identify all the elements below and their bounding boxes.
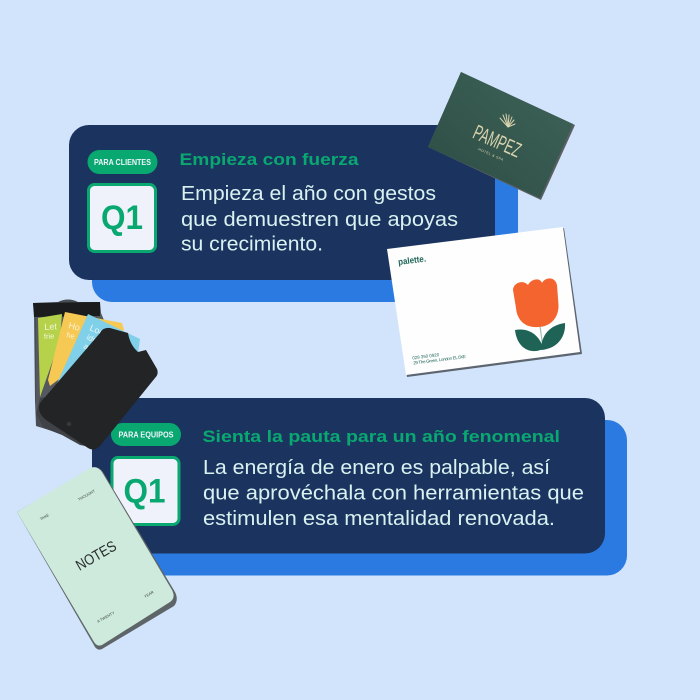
wallet back tray [33, 300, 108, 438]
text block: clientes: su crecimiento. [181, 234, 323, 256]
small labels: YEAR [144, 590, 155, 599]
wordmark: Pampez: PAMPEZ [469, 121, 525, 162]
notebook: notes [17, 467, 177, 650]
heading: empieza con fuerza: Empieza con fuerza [180, 150, 359, 169]
badge: Q1 clientes: Q1 [101, 199, 143, 237]
tag: para clientes [88, 150, 158, 174]
address text: 029 350 0920 [412, 352, 440, 360]
tag: para clientes: PARA CLIENTES [94, 157, 151, 167]
small labels: A TWENTY [97, 611, 116, 624]
panel shadow block: clientes [92, 147, 518, 302]
wallet: black card holder [33, 300, 158, 450]
wallet lower layer [36, 395, 96, 448]
card: yellow: Ho [68, 320, 81, 333]
wallet front cover [39, 328, 158, 450]
badge: Q1 equipos [112, 458, 179, 524]
text block: clientes: Empieza el año con gestos [181, 183, 436, 205]
icon: tulip [513, 278, 565, 351]
card: green [38, 314, 62, 397]
card: green: frie [44, 331, 55, 341]
text block: clientes [181, 183, 458, 256]
panel shadow block: equipos [115, 420, 627, 576]
card: blue [55, 314, 140, 388]
small labels [40, 489, 155, 624]
wordmark: palette: palette. [397, 254, 427, 267]
panel: para equipos [92, 398, 627, 576]
text block: equipos: estimulen esa mentalidad renovada. [203, 508, 555, 530]
panel: para clientes [69, 125, 518, 302]
card: green: Let [44, 321, 58, 332]
small labels: TAKE [40, 513, 50, 521]
panel body: clientes [69, 125, 495, 280]
text block: equipos: que aprovéchala con herramientas que [203, 482, 584, 504]
address text: 29 The Green, London EL 0XE [413, 354, 466, 365]
tag: para equipos [111, 423, 181, 446]
small labels: THOUGHT [78, 489, 96, 502]
card: blue: ide [85, 333, 99, 345]
text block: clientes: que demuestren que apoyas [181, 209, 458, 231]
text block: equipos: La energía de enero es palpable, así [203, 457, 550, 479]
panel body: equipos [92, 398, 605, 554]
tagline: hotel and spa: HOTEL & SPA [478, 147, 504, 162]
title: notes: NOTES [73, 538, 120, 574]
card: yellow: he [66, 330, 76, 341]
heading: sienta la pauta: Sienta la pauta para un año fenomenal [202, 427, 560, 446]
card: blue: ac [82, 342, 94, 353]
logo: palm [500, 114, 515, 127]
card: yellow [48, 312, 124, 386]
tag: para equipos: PARA EQUIPOS [118, 430, 174, 440]
badge: Q1 clientes [88, 184, 156, 252]
business card: Pampez [428, 72, 575, 200]
card: blue: Loo [88, 323, 106, 338]
postcard: palette [387, 227, 582, 377]
badge: Q1 equipos: Q1 [124, 472, 166, 510]
text block: equipos [203, 457, 584, 530]
